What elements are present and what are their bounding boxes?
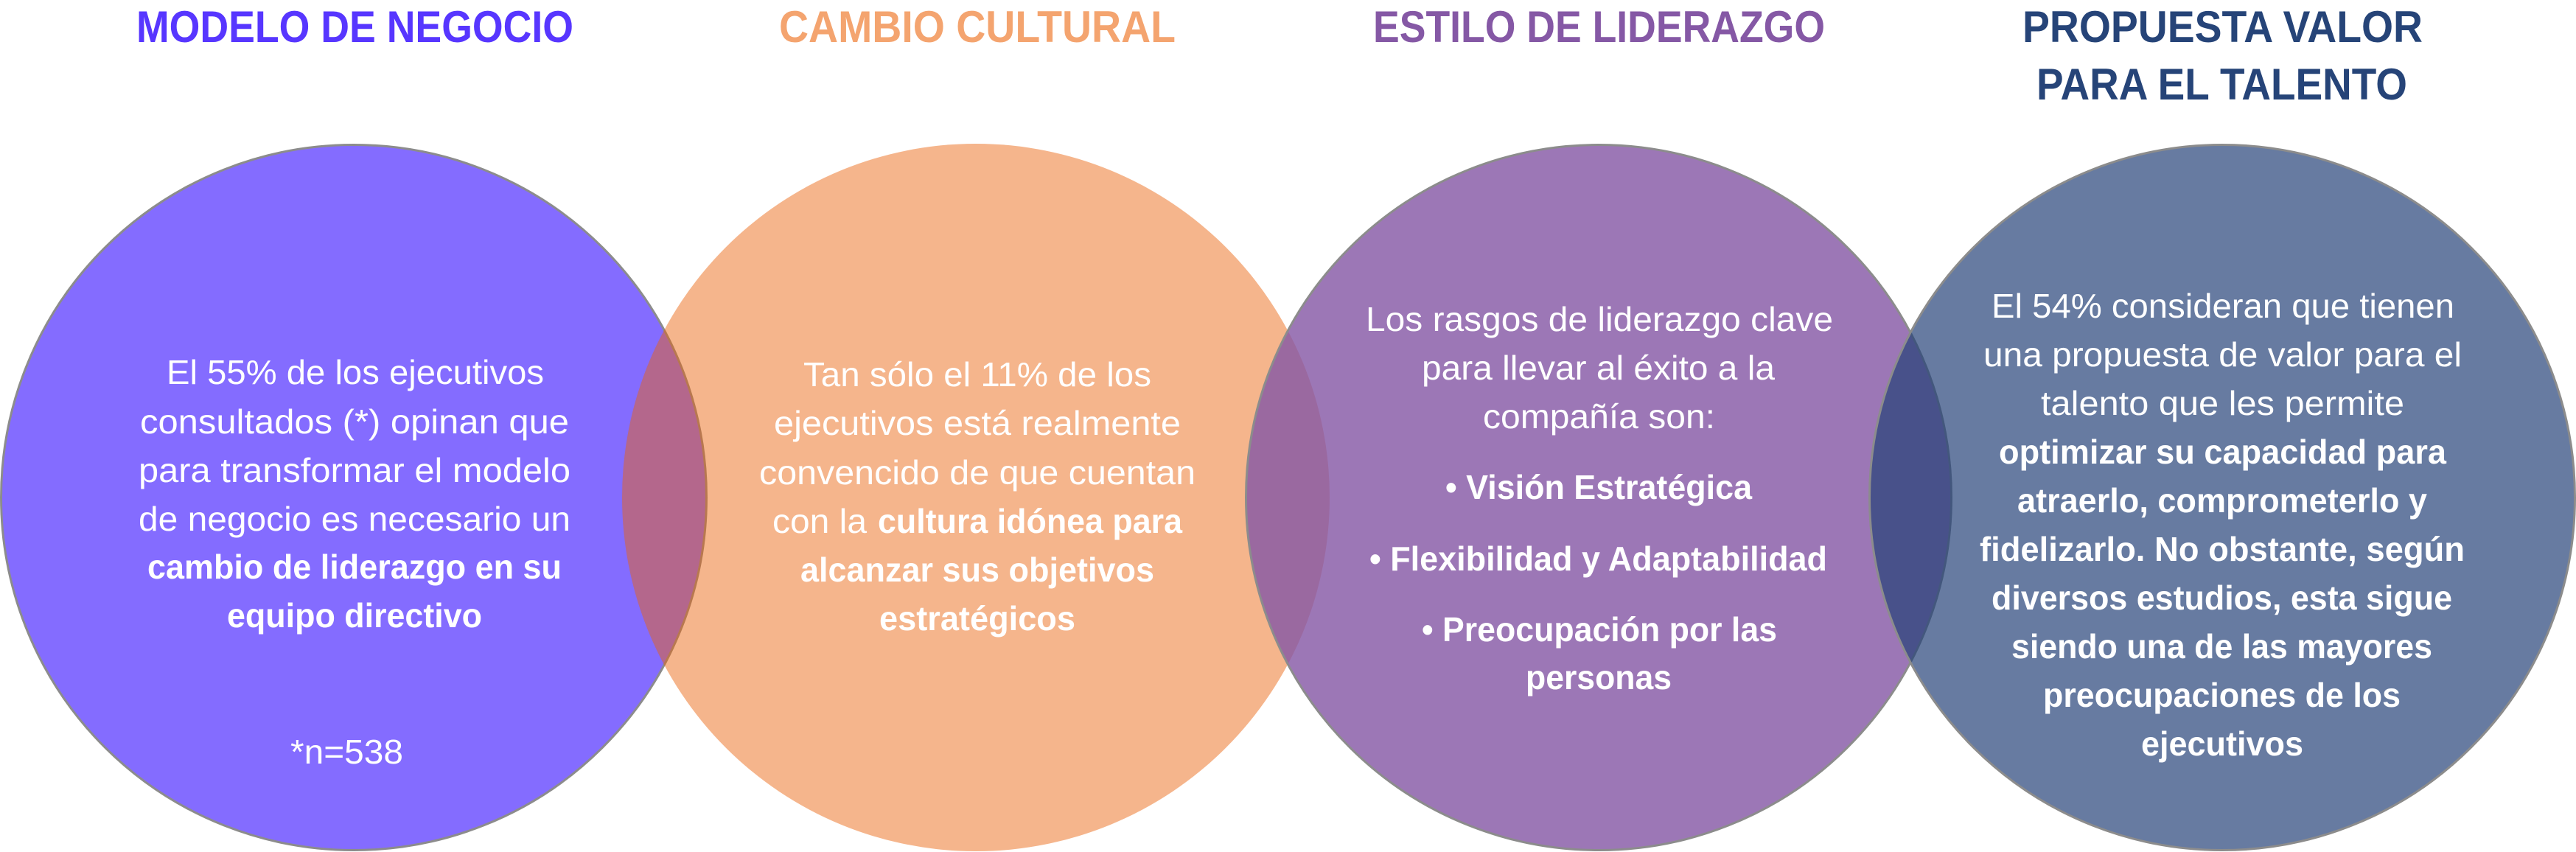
footnote: muestra: *n=538 — [290, 733, 403, 771]
text block: estilo de liderazgo: • Visión Estratégica — [1445, 468, 1752, 506]
text block: cambio cultural: ejecutivos está realmente — [774, 404, 1181, 442]
text block: propuesta valor — [1980, 287, 2465, 763]
text block: estilo de liderazgo: Los rasgos de liderazgo clave — [1366, 300, 1833, 338]
text block: propuesta valor: optimizar su capacidad para — [1999, 433, 2446, 471]
text block: modelo de negocio: cambio de liderazgo en su — [147, 548, 562, 586]
circle: propuesta valor — [1869, 144, 2575, 851]
heading: propuesta valor para el talento: PARA EL TALENTO — [2036, 60, 2407, 109]
text block: propuesta valor: siendo una de las mayores — [2011, 627, 2432, 666]
circle: modelo de negocio — [1, 144, 706, 851]
text block: estilo de liderazgo: • Flexibilidad y Adaptabilidad — [1369, 540, 1827, 578]
text block: cambio cultural: con la — [772, 502, 867, 540]
text block: propuesta valor: atraerlo, comprometerlo y — [2017, 481, 2427, 520]
text block: cambio cultural: cultura idónea para — [878, 502, 1182, 540]
heading: cambio cultural: CAMBIO CULTURAL — [779, 2, 1176, 52]
heading: modelo de negocio: MODELO DE NEGOCIO — [136, 2, 573, 52]
text block: cambio cultural: estratégicos — [879, 599, 1075, 638]
text block: propuesta valor: una propuesta de valor para el — [1983, 335, 2462, 374]
text block: propuesta valor: El 54% consideran que tienen — [1992, 287, 2454, 325]
text block: modelo de negocio: equipo directivo — [227, 596, 482, 635]
text block: modelo de negocio — [139, 353, 570, 635]
text block: propuesta valor: ejecutivos — [2141, 724, 2303, 763]
circle: estilo de liderazgo — [1246, 144, 1952, 851]
text block: modelo de negocio: de negocio es necesario un — [139, 500, 570, 538]
text block: cambio cultural: convencido de que cuentan — [759, 453, 1195, 492]
text block: cambio cultural — [759, 355, 1195, 638]
text block: propuesta valor: fidelizarlo. No obstante, según — [1980, 530, 2465, 568]
circle: cambio cultural — [622, 144, 1330, 851]
text block: estilo de liderazgo: personas — [1526, 658, 1672, 696]
text block: estilo de liderazgo: para llevar al éxito a la — [1422, 349, 1775, 387]
text block: estilo de liderazgo: • Preocupación por las — [1422, 610, 1777, 649]
text block: modelo de negocio: consultados (*) opinan que — [140, 402, 569, 441]
text block: estilo de liderazgo — [1366, 300, 1833, 696]
text block: cambio cultural: alcanzar sus objetivos — [800, 551, 1154, 589]
heading: propuesta valor para el talento: PROPUESTA VALOR — [2022, 2, 2423, 52]
text block: propuesta valor: diversos estudios, esta sigue — [1992, 579, 2452, 617]
text block: propuesta valor: preocupaciones de los — [2043, 676, 2401, 714]
text block: estilo de liderazgo: compañía son: — [1483, 397, 1715, 436]
text block: cambio cultural: Tan sólo el 11% de los — [803, 355, 1151, 394]
text block: modelo de negocio: El 55% de los ejecutivos — [167, 353, 544, 391]
text block: modelo de negocio: para transformar el modelo — [139, 451, 570, 489]
text block: propuesta valor: talento que les permite — [2041, 384, 2404, 422]
heading: propuesta valor para el talento — [2022, 2, 2423, 109]
heading: estilo de liderazgo: ESTILO DE LIDERAZGO — [1373, 2, 1825, 52]
